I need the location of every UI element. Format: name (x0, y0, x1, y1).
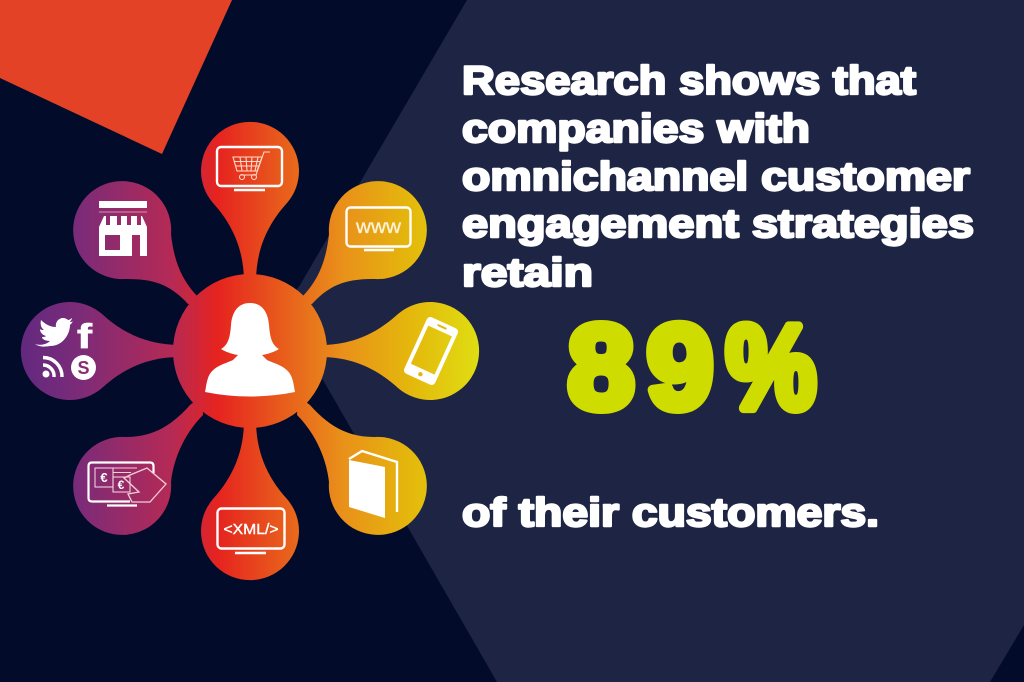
background panel: navy angled shape (250, 0, 1024, 682)
petal: right (320, 302, 479, 400)
petal: bottom (201, 420, 299, 580)
heading text: engagement strategies (462, 202, 974, 246)
big number: 89%: % (726, 301, 816, 434)
petal: upper left (73, 181, 202, 306)
icon: rss (42, 357, 62, 378)
icon: social media glyphs (35, 318, 96, 380)
petal: lower right (297, 396, 427, 535)
petal: lower left (73, 396, 203, 535)
corner shape: red polygon (0, 0, 232, 154)
icon: smartphone (403, 316, 459, 386)
icon: monitor with www: www (355, 217, 401, 238)
petal: left (21, 302, 180, 400)
petal: top (201, 122, 299, 282)
big number: 89% (568, 301, 816, 434)
heading text (462, 59, 974, 295)
icon: monitor with www (346, 208, 410, 250)
icon: book (349, 451, 397, 518)
big number: 89%: 8 (568, 301, 634, 434)
text: f glyph: f (77, 318, 93, 356)
icon: twitter bird (35, 318, 73, 347)
icon: monitor with payment tag: € (118, 478, 125, 492)
icon: monitor with xml (218, 508, 284, 553)
icon: monitor with shopping cart (217, 147, 282, 190)
icon: monitor with xml: <XML/> (224, 521, 279, 538)
hub diagram (21, 122, 479, 580)
hub circle (173, 274, 327, 428)
big number: 89%: 9 (647, 301, 713, 434)
heading text: omnichannel customer (462, 155, 970, 199)
petal: upper right (298, 181, 427, 306)
icon: monitor with payment tag: € (100, 470, 108, 485)
heading text: Research shows that (462, 59, 916, 103)
icon: monitor with payment tag (88, 462, 166, 506)
heading text: retain (462, 251, 593, 295)
heading text: companies with (462, 107, 810, 151)
icon: skype: S (77, 358, 90, 378)
icon: customer silhouette (205, 303, 295, 396)
closing text: of their customers. (462, 491, 879, 535)
icon: storefront (99, 201, 147, 256)
